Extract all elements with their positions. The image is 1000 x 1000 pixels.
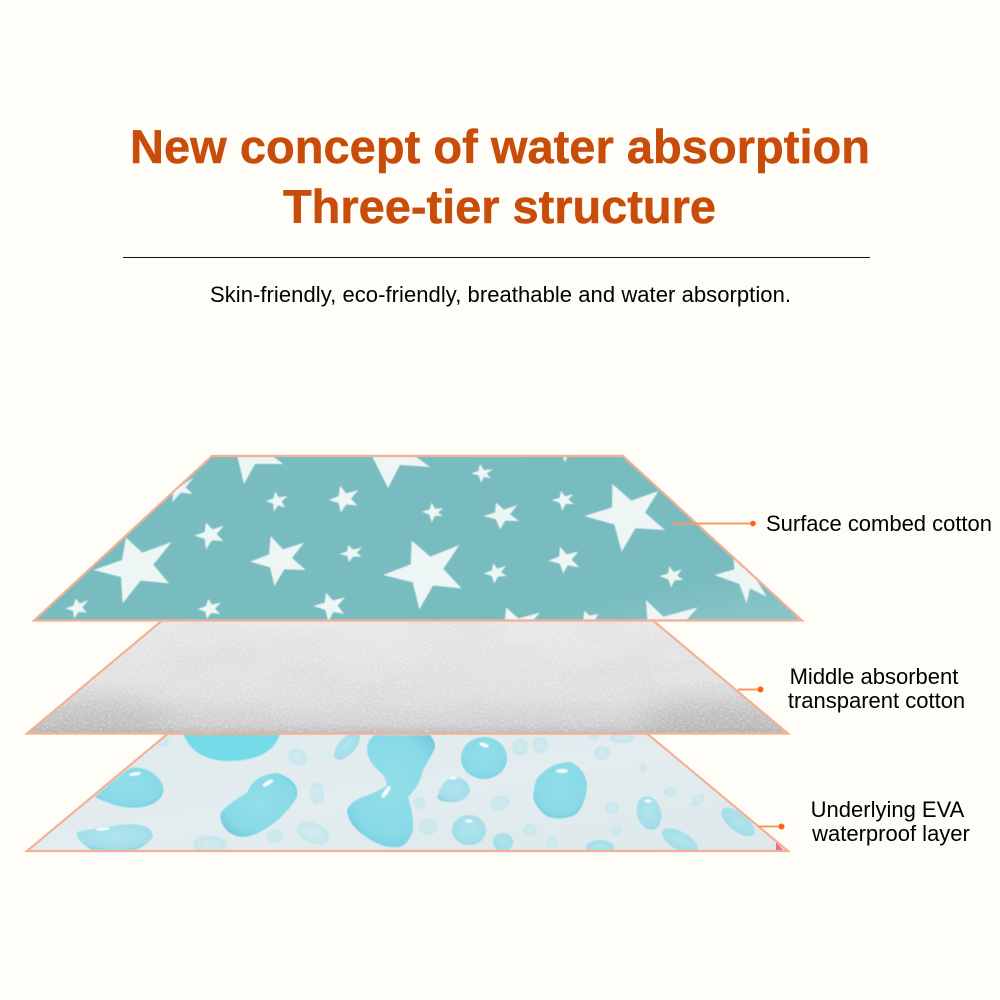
callout: underlying EVA waterproof layer: Underlying EVA <box>811 797 965 822</box>
title: New concept of water absorption <box>130 120 870 173</box>
panel: top layer, star print cotton <box>34 456 802 622</box>
heading rule <box>123 257 870 258</box>
callout: surface combed cotton: Surface combed cotton <box>766 511 992 536</box>
panel: middle layer, absorbent cotton <box>24 622 791 735</box>
cotton fibre texture <box>27 620 788 734</box>
water droplets <box>76 734 756 850</box>
callout: middle absorbent transparent cotton: transparent cotton <box>788 688 965 713</box>
callout: underlying EVA waterproof layer <box>758 797 970 846</box>
icon: pink corner <box>776 842 784 851</box>
title: Three-tier structure <box>283 180 716 233</box>
subtitle: Skin-friendly, eco-friendly, breathable and water absorption. <box>210 282 791 307</box>
outline: top layer <box>34 456 802 620</box>
cotton shading <box>32 691 782 732</box>
callout: underlying EVA waterproof layer: waterproof layer <box>811 821 970 846</box>
title <box>130 120 870 233</box>
star pattern <box>65 456 770 622</box>
callout: middle absorbent transparent cotton: Middle absorbent <box>790 664 958 689</box>
panel: bottom layer, EVA waterproof <box>27 728 788 859</box>
callout: middle absorbent transparent cotton <box>738 664 965 713</box>
outline: middle layer <box>27 620 788 734</box>
outline: bottom layer <box>27 734 788 851</box>
